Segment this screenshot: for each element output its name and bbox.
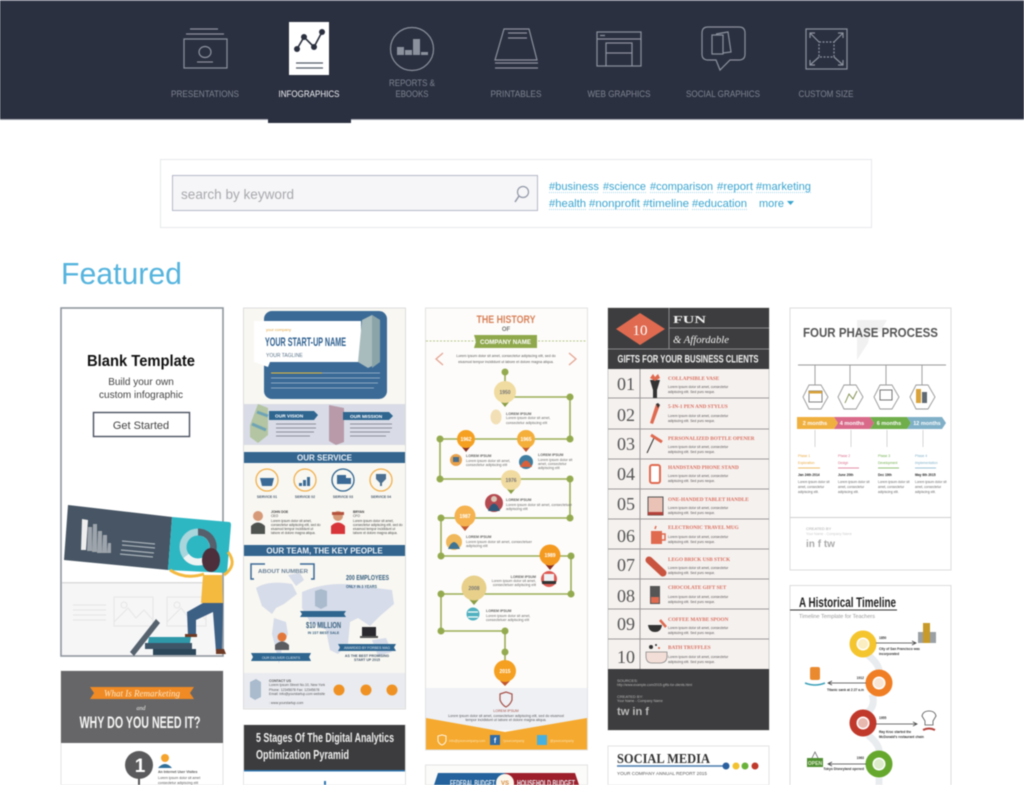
event captions: adipiscing elit: [466, 544, 488, 548]
keyword tags: #timeline: [643, 198, 689, 210]
divider and dots: [617, 762, 758, 770]
team members: labore et dolore magna aliqua.: [271, 531, 316, 535]
person icon: [158, 754, 172, 768]
phase hexagons: [803, 385, 935, 409]
get started button: [94, 412, 190, 436]
blue intro panel: YOUR TAGLINE: [266, 353, 303, 359]
search input: [172, 176, 538, 210]
header: GIFTS FOR YOUR BUSINESS CLIENTS: [618, 354, 758, 366]
event captions: LOREM IPSUM: [466, 535, 491, 539]
subtitle: Build your own: [108, 377, 174, 388]
title lines: [256, 730, 394, 762]
duration chevrons: 12 months: [913, 421, 941, 427]
event captions: Lorem ipsum dolor sit amet,: [486, 614, 530, 618]
card: digital analytics pyramid: [244, 725, 406, 785]
event captions: Lorem ipsum dolor sit amet,: [506, 416, 550, 420]
footer band: @yourcompany: [550, 739, 574, 743]
phase 1 text: Phase 1: [798, 454, 810, 458]
service labels: [257, 495, 391, 499]
team members: [251, 510, 403, 535]
label: presentations: PRESENTATIONS: [171, 89, 239, 99]
row 08: [617, 585, 729, 606]
footer: Your Name - Company Name: [617, 699, 663, 703]
row 06: adipiscing elit. Sed purs neque.: [668, 540, 715, 544]
label: reports and ebooks: EBOOKS: [396, 89, 428, 99]
team members: CFO: [353, 514, 360, 518]
team members: consectetur adipiscing elit, sed do: [353, 523, 403, 527]
step text: Lorem ipsum dolor sit amet: [158, 776, 200, 780]
row 02: adipiscing elit. Sed purs neque.: [668, 419, 715, 423]
row 07: 07: [617, 555, 635, 575]
team members: eiusmod tempor incididunt ut: [271, 527, 313, 531]
event captions: LOREM IPSUM: [511, 575, 536, 579]
row 06: [617, 525, 739, 546]
row 02: 5-IN-1 PEN AND STYLUS: [668, 404, 728, 410]
intro text and chevrons: Lorem ipsum dolor sit amet, consectetur adipiscing elit, sed do: [456, 354, 556, 358]
row 02: Lorem ipsum dolor sit amet, consectetur: [668, 414, 729, 418]
event 1912: 1912: [857, 676, 864, 680]
event 1850: incorporated: [879, 652, 899, 656]
card: history timeline: [426, 308, 588, 750]
search panel: [160, 160, 872, 228]
event captions: adipiscing elit: [538, 466, 560, 470]
phase 3 text: amet, consectetur: [878, 485, 905, 489]
phase 2 text: amet, consectetur: [838, 485, 865, 489]
world map and numbers: IN 1ST BEST SALE: [308, 631, 340, 635]
row 06: ELECTRONIC TRAVEL MUG: [668, 525, 739, 531]
keyword tags: #health: [549, 198, 586, 210]
footer band: [426, 688, 587, 750]
row 09: adipiscing elit. Sed purs neque.: [668, 631, 715, 635]
team heading: [244, 545, 405, 556]
event 1912: Titanic sank at 2:27 a.m: [827, 688, 864, 692]
phase 2 text: Lorem ipsum dolor sit: [838, 480, 870, 484]
event captions: consectetur adipiscing elit: [506, 421, 547, 425]
vision and mission band: [244, 404, 405, 445]
service labels: SERVICE 03: [333, 495, 353, 499]
row 02: 02: [617, 405, 635, 425]
footer: [608, 669, 769, 730]
team members: JOHN DOE: [271, 510, 289, 514]
heading: featured: Featured: [61, 256, 182, 291]
keyword tags: #education: [692, 198, 747, 210]
keyword tags: [549, 181, 811, 210]
label: web graphics: WEB GRAPHICS: [588, 89, 650, 99]
footer: http://www.example.com/2015-gifts-for-clients.html: [617, 683, 692, 687]
row 04: 04: [617, 464, 635, 484]
team members: Lorem ipsum dolor sit amet,: [353, 519, 394, 523]
world map and numbers: ONLY IN 3 YEARS: [346, 584, 377, 589]
header: FUN: [673, 314, 706, 326]
label: social graphics: SOCIAL GRAPHICS: [686, 89, 760, 99]
event 1963: [807, 752, 866, 771]
footer: CREATED BY:: [617, 694, 643, 699]
keyword tags: #marketing: [756, 181, 811, 193]
row 03: PERSONALIZED BOTTLE OPENER: [668, 436, 755, 442]
row 05: ONE-HANDED TABLET HANDLE: [668, 497, 749, 503]
phase 2 text: Design: [838, 461, 848, 465]
title: A Historical Timeline: [799, 594, 896, 610]
orange ribbon: [90, 687, 194, 699]
duration chevrons: 4 months: [840, 421, 864, 427]
footer contact: : www.yourstartup.com: [269, 701, 303, 705]
team heading: OUR TEAM, THE KEY PEOPLE: [266, 546, 383, 556]
keyword tags: #nonprofit: [589, 198, 640, 210]
created by: CREATED BY: [806, 526, 832, 531]
phase 3 text: Phase 3: [878, 454, 890, 458]
phase 2 text: June 20th: [838, 473, 853, 477]
search input: search by keyword: [181, 186, 294, 202]
row 09: Lorem ipsum dolor sit amet, consectetur: [668, 626, 729, 630]
phase 4 text: adipiscing elit.: [915, 490, 936, 494]
number one badge: 1: [135, 756, 146, 777]
card: four phase process: [790, 308, 951, 570]
card: fun and affordable gifts: [608, 308, 769, 730]
footer: tw in f: [617, 706, 649, 718]
event 1850: 1850: [879, 636, 887, 640]
footer contact: CONTACT US: [269, 679, 292, 683]
row 07: LEGO BRICK USB STICK: [668, 557, 730, 563]
phase 4 text: Implementation: [915, 461, 938, 465]
card: social media report: [608, 746, 769, 785]
phase 1 text: [798, 454, 830, 494]
row 05: [617, 494, 749, 515]
team members: labore et dolore magna aliqua.: [353, 531, 398, 535]
company ribbon: COMPANY NAME: [480, 339, 531, 346]
row 04: adipiscing elit. Sed purs neque.: [668, 479, 715, 483]
row 10: Lorem ipsum dolor sit amet, consectetur: [668, 655, 729, 659]
blue intro panel: [254, 311, 387, 399]
illustration: person lifting chart panel: [62, 505, 232, 656]
team members: Lorem ipsum dolor sit amet,: [271, 519, 312, 523]
duration chevrons: 6 months: [877, 421, 901, 427]
keyword tags: #business: [549, 181, 599, 193]
event captions: consectetur adipiscing elit: [466, 463, 507, 467]
vision and mission band: OUR MISSION: [350, 414, 383, 420]
footer contact: Phone: 12345678 Fax: 12345678: [269, 688, 319, 692]
phase 3 text: adipiscing elit.: [878, 490, 899, 494]
row 07: Lorem ipsum dolor sit amet, consectetur: [668, 566, 729, 570]
row 09: COFFEE MAYBE SPOON: [668, 617, 729, 623]
footer: SOURCES:: [617, 678, 638, 683]
label: infographics: INFOGRAPHICS: [278, 89, 340, 99]
service labels: SERVICE 04: [371, 495, 391, 499]
event captions: consectetuer adipiscing elit: [493, 583, 536, 587]
event captions: LOREM IPSUM: [538, 453, 563, 457]
phase 4 text: [915, 454, 947, 494]
connector lines: [798, 365, 946, 385]
created by: in f tw: [806, 539, 835, 550]
title: THE HISTORY: [476, 314, 536, 326]
service icons: [256, 469, 392, 491]
world map and numbers: $10 MILLION: [306, 621, 341, 630]
footer band: tempor incididunt ut labore et dolore magna aliqua.: [466, 718, 546, 722]
phase 4 text: Lorem ipsum dolor sit: [915, 480, 947, 484]
year pins: 1965: [520, 437, 532, 443]
row 10: [617, 644, 729, 667]
card: blank template: [61, 308, 232, 656]
headline: WHY DO YOU NEED IT?: [80, 713, 200, 732]
header: [608, 308, 769, 369]
row 05: Lorem ipsum dolor sit amet, consectetur: [668, 506, 729, 510]
header: 10: [632, 323, 648, 339]
icon: custom size: [806, 29, 847, 69]
label: custom size: CUSTOM SIZE: [798, 89, 854, 99]
row 01: COLLAPSIBLE VASE: [668, 376, 720, 382]
phase 4 text: amet, consectetur: [915, 485, 942, 489]
step text: [158, 770, 200, 785]
row 06: Lorem ipsum dolor sit amet, consectetur: [668, 535, 729, 539]
year pins: 1989: [544, 553, 556, 559]
row 04: Lorem ipsum dolor sit amet, consectetur: [668, 474, 729, 478]
phase 2 text: [838, 454, 870, 494]
event 1963: OPEN: [808, 761, 822, 767]
title: OF: [502, 327, 510, 333]
row 10: 10: [617, 647, 635, 667]
timeline path: [436, 368, 574, 671]
row 04: HANDSTAND PHONE STAND: [668, 465, 739, 471]
row 03: [617, 434, 755, 454]
event 1955: McDonald's restaurant chain: [879, 735, 924, 739]
row 08: Lorem ipsum dolor sit amet, consectetur: [668, 595, 729, 599]
phase 4 text: Phase 4: [915, 454, 927, 458]
footer band: /yourcompany: [503, 739, 525, 743]
year pins: 1950: [499, 390, 511, 396]
row 05: adipiscing elit. Sed purs neque.: [668, 511, 715, 515]
event captions: Lorem ipsum dolor sit amet, consectetuer: [466, 540, 533, 544]
card: historical timeline: [790, 586, 951, 785]
navigation header: [0, 0, 1024, 123]
title lines: Optimization Pyramid: [256, 747, 349, 762]
blue intro panel: YOUR START-UP NAME: [265, 335, 346, 349]
event 1963: Tokyo Disneyland opened: [823, 767, 864, 771]
phase 3 text: Lorem ipsum dolor sit: [878, 480, 910, 484]
world map and numbers: ABOUT NUMBER: [258, 569, 308, 575]
vision and mission band: OUR VISION: [275, 414, 304, 420]
event captions: LOREM IPSUM: [486, 609, 511, 613]
header: & Affordable: [673, 334, 729, 346]
row 01: adipiscing elit. Sed purs neque.: [668, 390, 715, 394]
row 03: adipiscing elit. Sed purs neque.: [668, 450, 715, 454]
team members: consectetur adipiscing elit, sed do: [271, 523, 321, 527]
year pins: 1987: [459, 514, 471, 520]
world map and numbers: OUR DELIVER CLIENTS: [262, 656, 301, 660]
icon: web graphics: [597, 32, 641, 66]
budget labels: [450, 779, 575, 785]
icon: reports and ebooks: [390, 28, 434, 70]
orange ribbon: What Is Remarketing: [104, 688, 180, 698]
phase 4 text: May 6th 2015: [915, 473, 936, 477]
number one badge: [125, 751, 153, 785]
row dividers: [608, 369, 769, 669]
year pins: 1962: [460, 437, 472, 443]
team members: eiusmod tempor incididunt ut: [353, 527, 395, 531]
world map and numbers: [251, 564, 396, 664]
icon: social graphics: [702, 27, 745, 70]
event captions: LOREM IPSUM: [506, 412, 531, 416]
subtitle: [99, 377, 183, 401]
row 01: 01: [617, 374, 635, 394]
icon: presentations: [184, 29, 227, 68]
team members: BRYAN: [353, 510, 365, 514]
world map and numbers: START UP 2015: [354, 658, 380, 662]
phase 3 text: Development: [878, 461, 898, 465]
row 08: adipiscing elit. Sed purs neque.: [668, 600, 715, 604]
event 1912: [805, 667, 866, 692]
event captions: LOREM IPSUM: [466, 454, 491, 458]
row 08: CHOCOLATE GIFT SET: [668, 585, 727, 591]
keyword tags: #science: [603, 181, 646, 193]
footer contact: Email: info@yourstartup.com website: [269, 692, 325, 696]
service labels: SERVICE 02: [295, 495, 315, 499]
row 09: [617, 614, 729, 635]
event captions: Lorem ipsum dolor sit amet, consectetuer: [506, 503, 573, 507]
row 01: [617, 374, 729, 398]
label: printables: PRINTABLES: [490, 89, 542, 99]
event captions: adipiscing elit: [506, 507, 528, 511]
phase 2 text: Phase 2: [838, 454, 850, 458]
world map and numbers: AS THE BEST PROMISING: [345, 654, 389, 658]
intro text and chevrons: eiusmod tempor incididunt ut labore et dolore magna aliqua.: [458, 360, 554, 364]
intro text and chevrons: [436, 353, 576, 365]
year pins: 2008: [468, 586, 480, 592]
step text: An Internet User Visites: [158, 770, 197, 774]
icon: infographics: [289, 22, 329, 75]
row 07: adipiscing elit. Sed purs neque.: [668, 571, 715, 575]
footer band: info@yourcompany.com: [449, 739, 486, 743]
row 10: BATH TRUFFLES: [668, 645, 711, 651]
step text: consectetur adipiscing elit: [158, 781, 198, 785]
year pins: 2015: [499, 669, 511, 675]
event captions: [466, 412, 573, 622]
timeline rings: [853, 634, 889, 774]
row 05: 05: [617, 494, 635, 514]
event captions: amet, consectetur: [538, 462, 567, 466]
get started button: Get Started: [113, 420, 169, 432]
title: FOUR PHASE PROCESS: [803, 326, 938, 340]
row 09: 09: [617, 614, 635, 634]
phase 3 text: [878, 454, 910, 494]
row 10: adipiscing elit. Sed purs neque.: [668, 660, 715, 664]
connecting ribbon: [868, 655, 879, 785]
phase 1 text: Exploration: [798, 461, 815, 465]
event 1955: 1955: [879, 716, 887, 720]
row 06: 06: [617, 526, 635, 546]
service labels: SERVICE 01: [257, 495, 277, 499]
label: reports and ebooks: [389, 78, 435, 99]
subtitle: Timeline Template for Teachers: [799, 614, 875, 620]
subtitle: YOUR COMPANY ANNUAL REPORT 2015: [617, 771, 708, 776]
phase 2 text: adipiscing elit.: [838, 490, 859, 494]
footer band: f: [494, 738, 497, 745]
title: SOCIAL MEDIA: [617, 752, 711, 767]
subtitle: custom infographic: [99, 390, 183, 401]
icon: printables: [495, 29, 538, 68]
row 04: [617, 464, 739, 484]
title: Blank Template: [87, 353, 195, 370]
phase 3 text: Dec 19th: [878, 473, 892, 477]
row 03: Lorem ipsum dolor sit amet, consectetur: [668, 445, 729, 449]
duration chevrons: [797, 417, 946, 429]
timeline avatars: [446, 410, 557, 620]
event 1955: [876, 711, 936, 739]
event captions: consectetuer adipiscing elit: [486, 618, 529, 622]
event 1850: City of San Francisco was: [879, 647, 920, 651]
team members: CEO: [271, 514, 279, 518]
phase 1 text: adipiscing elit.: [798, 490, 819, 494]
row 01: Lorem ipsum dolor sit amet, consectetur: [668, 385, 729, 389]
our service heading: OUR SERVICE: [297, 454, 353, 462]
event captions: Lorem ipsum dolor sit amet,: [466, 459, 510, 463]
event 1963: 1963: [857, 756, 864, 760]
phase 1 text: Jan 24th 2014: [798, 473, 820, 477]
card: remarketing: [61, 671, 223, 785]
year pins: [454, 381, 560, 686]
event captions: Lorem ipsum dolor sit amet,: [492, 579, 536, 583]
keyword tags: #report: [717, 181, 753, 193]
keyword tags: #comparison: [650, 181, 713, 193]
world map and numbers: 200 EMPLOYEES: [346, 573, 389, 582]
created by: [806, 526, 852, 550]
event captions: Lorem ipsum dolor sit: [538, 458, 572, 462]
footer band: Lorem ipsum dolor sit amet, consectetuer adipiscing elit, sed do eiusmod: [448, 714, 564, 718]
card: federal vs household budget: [426, 765, 588, 785]
footer contact: [244, 673, 405, 708]
created by: Your Name - Company Name: [806, 532, 852, 536]
row 08: 08: [617, 586, 635, 606]
year pins: 1976: [505, 478, 517, 484]
title: [476, 314, 536, 333]
event 1850: [876, 623, 936, 656]
phase 1 text: Lorem ipsum dolor sit: [798, 480, 830, 484]
footer band: LOREM IPSUM: [493, 709, 519, 713]
duration chevrons: 2 months: [803, 421, 827, 427]
row 03: 03: [617, 434, 635, 454]
our service heading: [244, 452, 405, 463]
blue intro panel: your company: [266, 327, 291, 332]
company ribbon: [426, 335, 586, 348]
title lines: 5 Stages Of The Digital Analytics: [256, 730, 394, 745]
card: start-up infographic: [244, 308, 406, 709]
row 07: [617, 555, 730, 575]
phase 1 text: amet, consectetur: [798, 485, 825, 489]
row 02: [617, 403, 729, 425]
event 1955: Ray Kroc started the: [879, 730, 911, 734]
world map and numbers: AWARDED BY FORBES MAG: [344, 646, 390, 650]
label: reports and ebooks: REPORTS &: [389, 78, 435, 88]
and: and: [136, 706, 146, 712]
footer contact: Lorem Ipsum Street No.10, New York: [269, 683, 325, 687]
event captions: LOREM IPSUM: [506, 498, 531, 502]
keyword tags: more: [759, 198, 784, 210]
